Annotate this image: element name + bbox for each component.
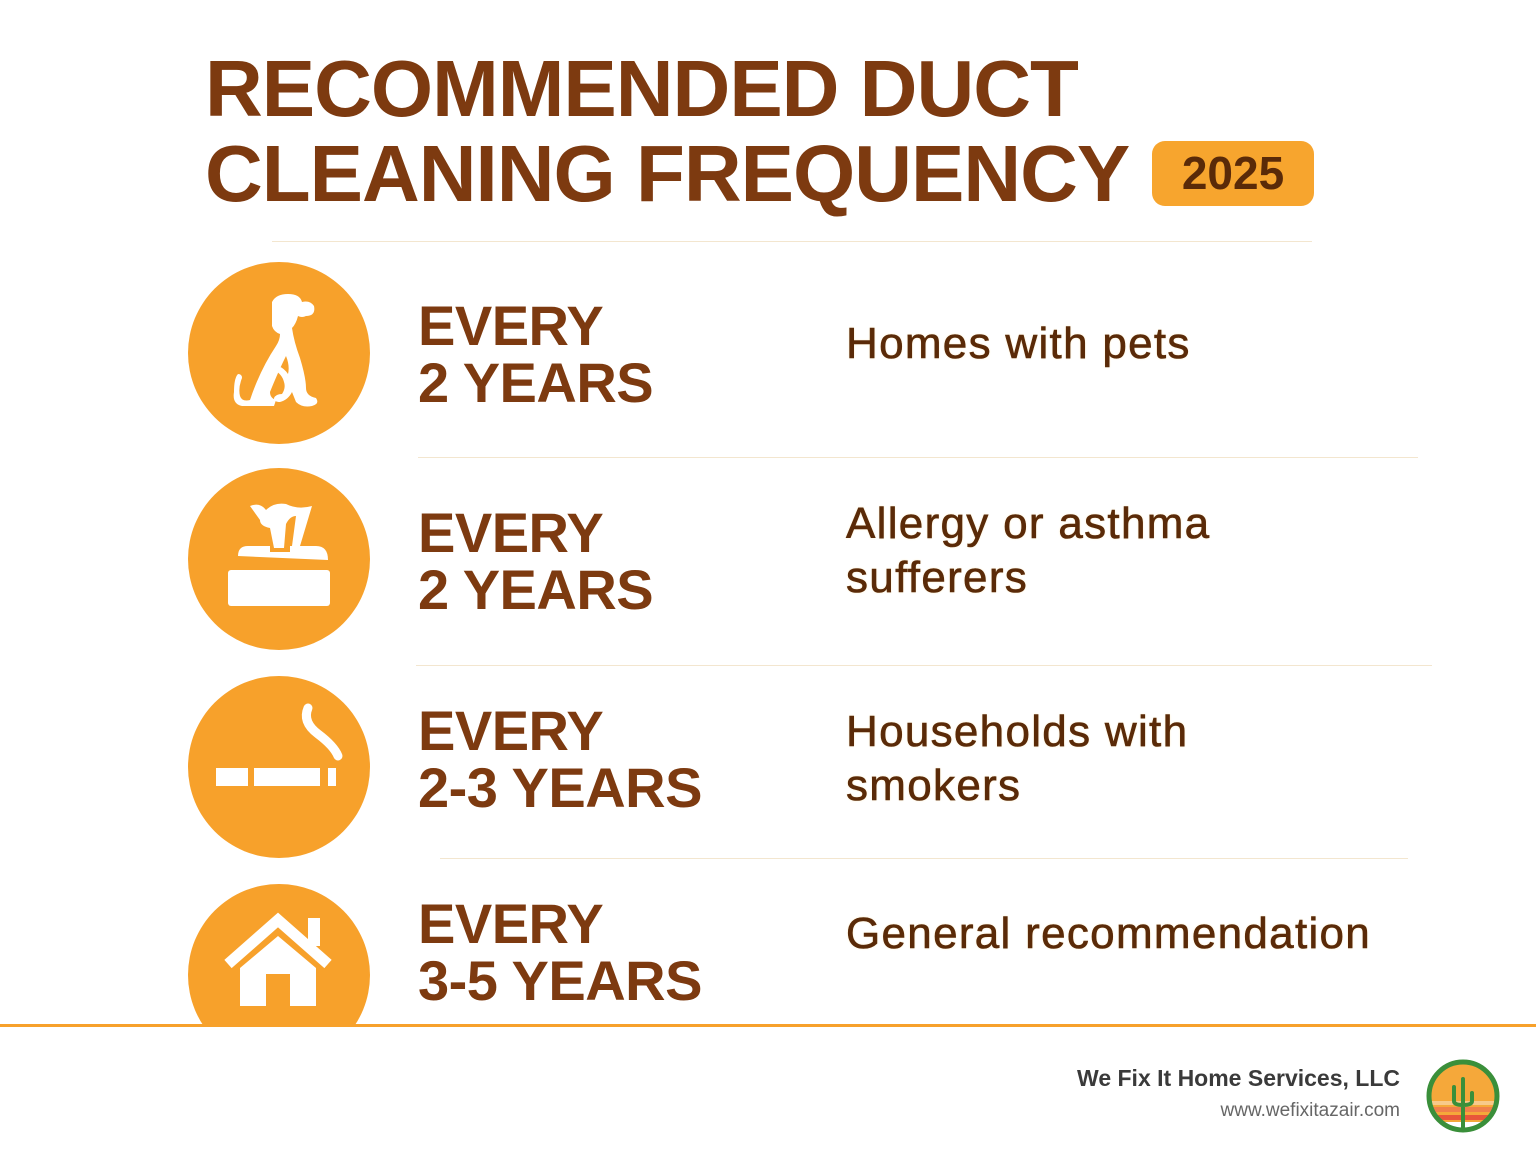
row 2 frequency: EVERY [418, 501, 603, 564]
row 3 frequency: EVERY [418, 699, 603, 762]
row 4 frequency: 3-5 YEARS [418, 949, 702, 1012]
row 3 description [846, 707, 1188, 810]
title: RECOMMENDED DUCT [205, 44, 1078, 133]
row 4 description: General recommendation [846, 909, 1371, 958]
icon: house [188, 884, 370, 1066]
badge: 2025: 2025 [1182, 147, 1284, 199]
website: www.wefixitazair.com [1220, 1100, 1400, 1121]
row 1 frequency: 2 YEARS [418, 351, 653, 414]
footer [0, 1024, 1536, 1132]
row 1 description: Homes with pets [846, 319, 1191, 368]
row 4 frequency: EVERY [418, 892, 603, 955]
icon: tissue box [188, 468, 370, 650]
row 2 description: Allergy or asthma [846, 499, 1210, 548]
row 3 description: smokers [846, 761, 1021, 810]
row 3 frequency [418, 699, 702, 819]
title [205, 44, 1129, 218]
company name: We Fix It Home Services, LLC [1077, 1065, 1400, 1091]
row 1 frequency [418, 294, 653, 414]
title: CLEANING FREQUENCY [205, 129, 1129, 218]
row 4 frequency [418, 892, 702, 1012]
badge: 2025 [1152, 141, 1314, 206]
row 2 description: sufferers [846, 553, 1028, 602]
row 1 frequency: EVERY [418, 294, 603, 357]
icon: dog [188, 262, 370, 444]
row 2 frequency: 2 YEARS [418, 558, 653, 621]
row 3 description: Households with [846, 707, 1188, 756]
logo [1426, 1060, 1500, 1132]
row 2 description [846, 499, 1210, 602]
row 3 frequency: 2-3 YEARS [418, 756, 702, 819]
row 2 frequency [418, 501, 653, 621]
icon: cigarette [188, 676, 370, 858]
